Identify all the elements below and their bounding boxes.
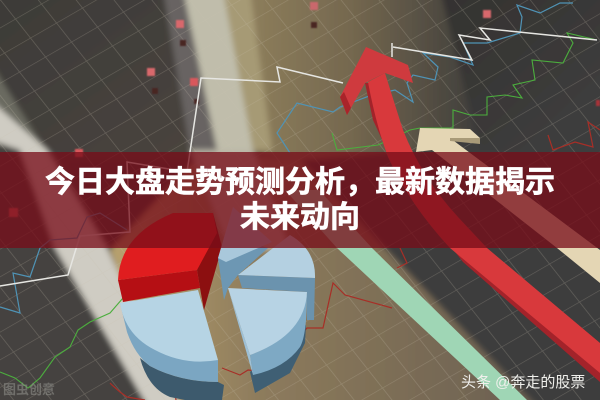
blue slice: large (120, 303, 218, 382)
cream arrow (416, 128, 600, 283)
blue slice: upper back (218, 240, 268, 300)
watermark: author: 头条 @奔走的股票 (461, 374, 585, 391)
red data points (9, 2, 600, 217)
blue slice: right (238, 275, 315, 320)
title banner (0, 152, 600, 248)
title line 1: 今日大盘走势预测分析，最新数据揭示 (45, 166, 555, 199)
white line series (0, 28, 597, 286)
red line series (110, 122, 600, 400)
pie base shadow (140, 358, 224, 400)
blue slice: front (250, 292, 307, 375)
red arrow (340, 47, 600, 382)
watermark: image credit: 图虫创意 (3, 382, 55, 397)
red slice (197, 213, 222, 310)
pie chart (118, 207, 315, 400)
blue line series (0, 3, 573, 313)
title line 2: 未来动向 (240, 201, 360, 234)
green bar (285, 190, 527, 400)
